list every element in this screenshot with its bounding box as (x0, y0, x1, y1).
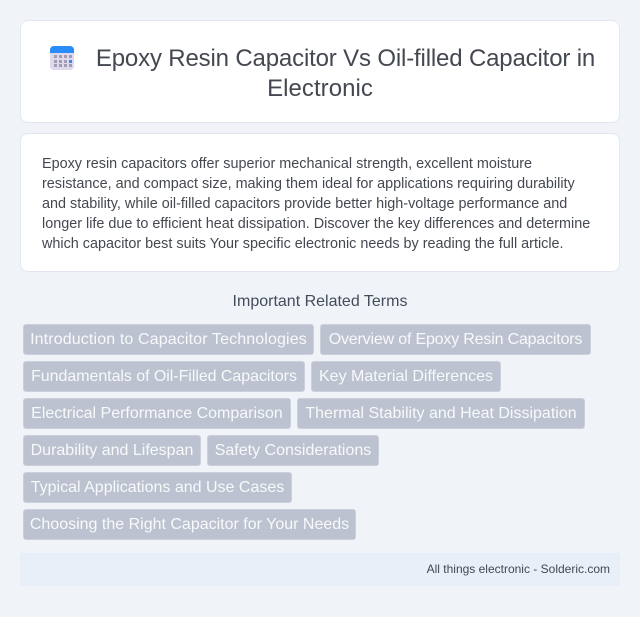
description text: Epoxy resin capacitors offer superior mechanical strength, excellent moisture (42, 156, 532, 172)
tag (320, 324, 591, 355)
footer bar (20, 553, 620, 586)
description text (42, 156, 590, 252)
tag list (23, 324, 591, 540)
tag (23, 472, 292, 503)
tag: Typical Applications and Use Cases (31, 479, 284, 496)
description text: which capacitor best suits Your specific electronic needs by reading the full article. (42, 236, 564, 252)
tag (23, 435, 201, 466)
tag: Overview of Epoxy Resin Capacitors (329, 331, 582, 348)
description text: and stability, while oil-filled capacitors provide better high-voltage performance and (42, 196, 567, 212)
description text: resistance, and compact size, making them ideal for applications requiring durability (42, 176, 575, 192)
tag (23, 324, 314, 355)
tag (297, 398, 585, 429)
tag (23, 509, 356, 540)
tag: Safety Considerations (215, 442, 371, 459)
tag (23, 398, 291, 429)
title: Epoxy Resin Capacitor Vs Oil-filled Capacitor in (96, 45, 595, 72)
tag: Key Material Differences (319, 368, 493, 385)
panel: description card (20, 133, 620, 272)
title (96, 45, 595, 102)
tag (207, 435, 379, 466)
footer text: All things electronic - Solderic.com (427, 562, 610, 576)
tag: Electrical Performance Comparison (31, 405, 283, 422)
heading: important related terms: Important Related Terms (233, 293, 407, 310)
tag: Thermal Stability and Heat Dissipation (305, 405, 577, 422)
icon: calendar (50, 46, 74, 70)
tag: Fundamentals of Oil-Filled Capacitors (31, 368, 297, 385)
tag: Introduction to Capacitor Technologies (30, 331, 307, 348)
tag: Durability and Lifespan (31, 442, 193, 459)
description text: longer life due to efficient heat dissipation. Discover the key differences and determine (42, 216, 590, 232)
title: Electronic (267, 75, 373, 102)
tag: Choosing the Right Capacitor for Your Needs (30, 516, 349, 533)
tag (311, 361, 501, 392)
panel: header card (20, 20, 620, 123)
tag (23, 361, 305, 392)
